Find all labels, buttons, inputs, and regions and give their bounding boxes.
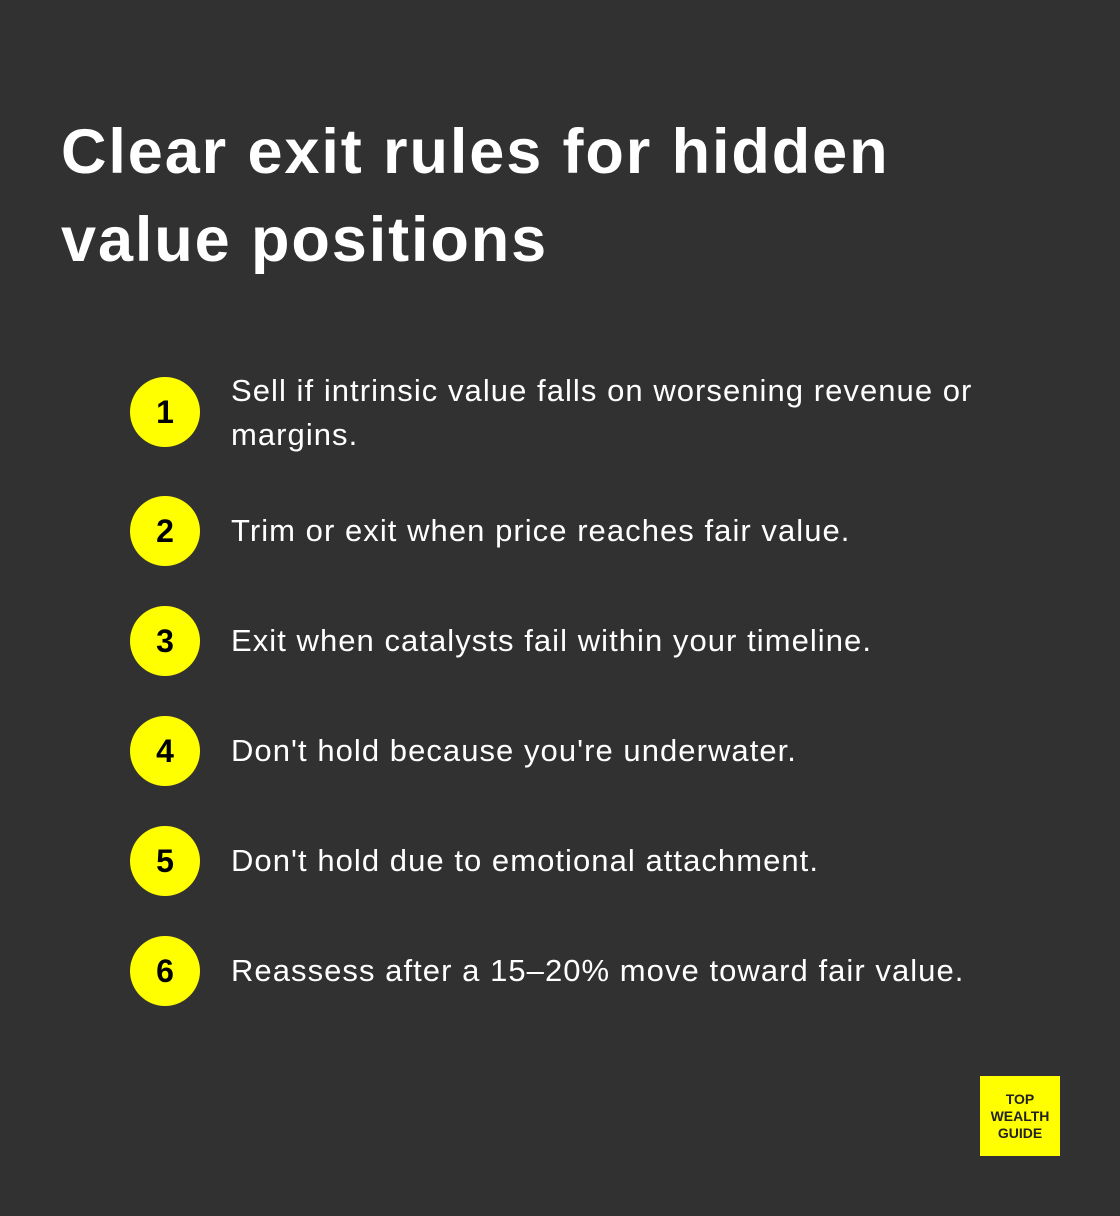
logo: WEALTH (991, 1108, 1049, 1124)
title: Clear exit rules for hidden (61, 117, 890, 187)
item 5 (130, 826, 819, 896)
item 2: Trim or exit when price reaches fair value. (231, 513, 850, 548)
title: value positions (61, 205, 548, 275)
item 4 (130, 716, 797, 786)
item 5: 5 (156, 843, 174, 879)
item 3 (130, 606, 872, 676)
item 2: 2 (156, 513, 174, 549)
item 1: margins. (231, 417, 358, 452)
item 6: 6 (156, 953, 174, 989)
item 6 (130, 936, 964, 1006)
item 5: Don't hold due to emotional attachment. (231, 843, 819, 878)
logo: TOP (1006, 1090, 1034, 1106)
item 3: 3 (156, 623, 174, 659)
logo: GUIDE (998, 1124, 1042, 1140)
item 4: Don't hold because you're underwater. (231, 733, 797, 768)
logo (980, 1076, 1060, 1156)
item 1 (130, 373, 972, 452)
item 6: Reassess after a 15–20% move toward fair value. (231, 953, 964, 988)
item 1: 1 (156, 394, 174, 430)
title (61, 117, 890, 275)
item 4: 4 (156, 733, 174, 769)
item 1: Sell if intrinsic value falls on worsening revenue or (231, 373, 972, 408)
item 3: Exit when catalysts fail within your timeline. (231, 623, 872, 658)
item 2 (130, 496, 850, 566)
